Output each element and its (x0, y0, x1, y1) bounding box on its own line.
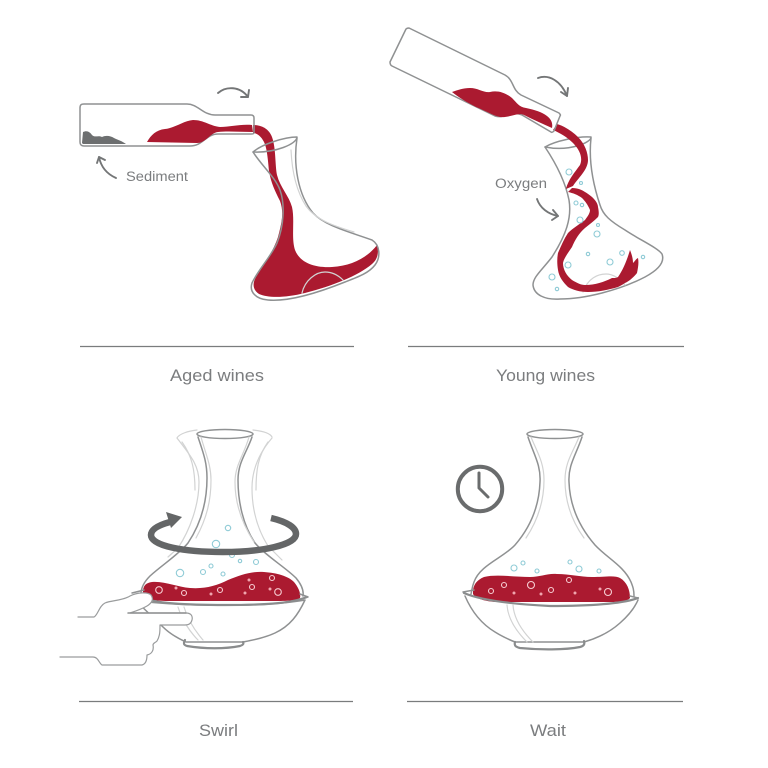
decanter (141, 430, 303, 596)
arrow: oxygen (537, 199, 558, 220)
panel: swirl (60, 430, 308, 740)
wine (473, 574, 630, 602)
bubbles (549, 169, 645, 291)
wine (143, 572, 300, 601)
decanter (251, 137, 379, 300)
decanter (471, 430, 634, 596)
blue bubbles (511, 560, 601, 573)
divider: wait (407, 700, 683, 702)
icon: hand (60, 593, 192, 665)
wine stream and decanter fill (253, 125, 378, 297)
label: oxygen: Oxygen (495, 176, 547, 191)
wine bubbles (488, 578, 612, 596)
decanter (533, 137, 663, 299)
bottle (390, 28, 560, 132)
divider and heading: aged wines: Aged wines (170, 367, 264, 385)
divider: swirl (79, 700, 353, 702)
panel: aged wines (80, 88, 379, 300)
panel: wait (458, 430, 638, 740)
label: swirl: Swirl (199, 722, 238, 740)
blue bubbles (176, 525, 258, 577)
arrow: sediment (97, 157, 116, 178)
bowl (463, 590, 638, 649)
sediment (82, 131, 126, 144)
bowl (132, 590, 308, 648)
ghost decanter (168, 430, 282, 560)
label: wait: Wait (530, 722, 566, 740)
wine ribbon (553, 124, 638, 292)
arrow: pour direction (538, 77, 568, 96)
panel: young wines (390, 28, 663, 299)
bottle (80, 104, 254, 146)
wine in bottle (147, 120, 253, 143)
icon: clock (458, 467, 502, 511)
label: sediment: Sediment (126, 169, 188, 184)
wine bubbles (156, 576, 281, 596)
divider and heading: young wines: Young wines (496, 367, 595, 385)
arrow: swirl rotation (151, 512, 296, 552)
wine in bottle (452, 88, 552, 128)
arrow: pour direction (218, 88, 249, 97)
